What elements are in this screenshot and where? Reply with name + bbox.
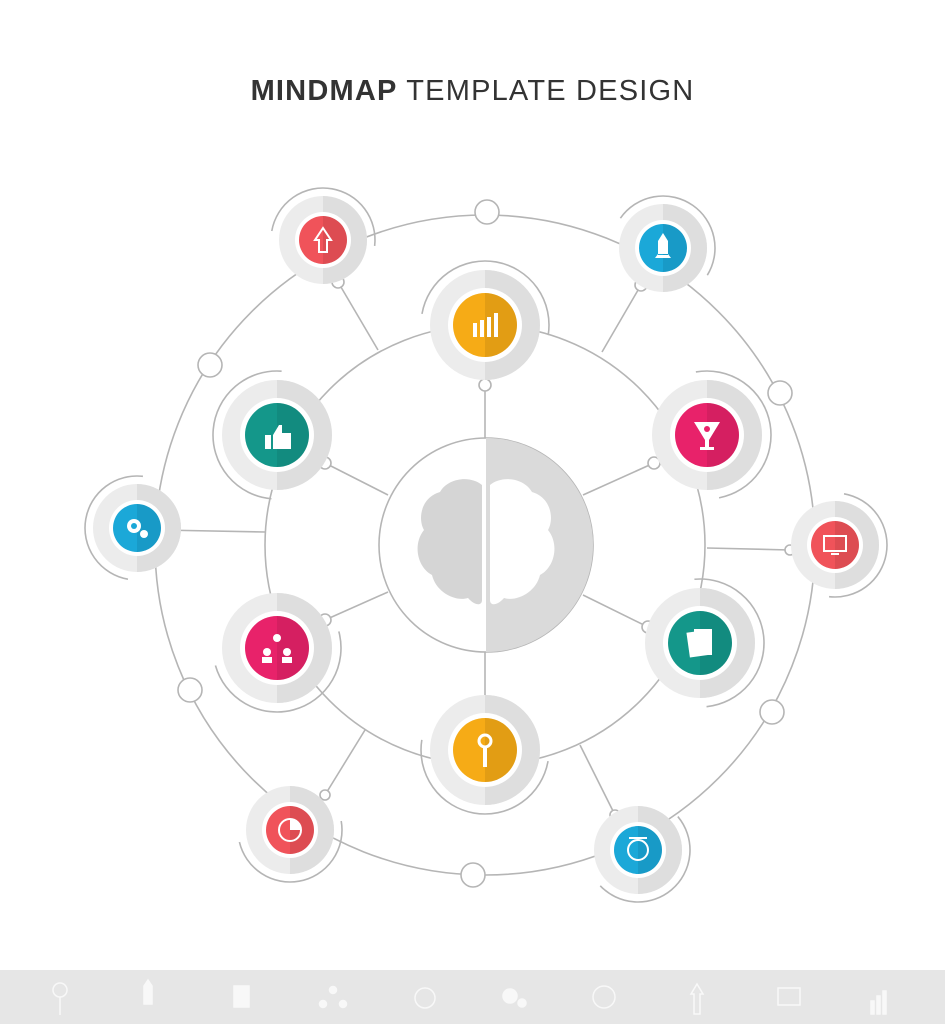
node: trophy (pink) [633, 361, 781, 509]
icon: monitor [778, 988, 800, 1005]
node: alarm clock (blue outer) [565, 777, 711, 923]
bottom icon bar [0, 970, 945, 1024]
node: thumbs up (teal) [208, 366, 346, 504]
node: key (yellow bottom) [411, 676, 559, 824]
icon: pie [593, 986, 615, 1008]
node: cards (teal) [631, 574, 769, 712]
node: rocket (blue outer) [591, 176, 735, 320]
connectors [160, 282, 790, 815]
icon: cards [234, 986, 249, 1007]
joint dots [150, 276, 795, 820]
icon: key [53, 983, 67, 1015]
inner ring [265, 325, 705, 765]
node: pie chart (red outer) [230, 770, 350, 890]
icon: clock [415, 988, 435, 1008]
icon: rocket [144, 980, 152, 1004]
title: MINDMAP TEMPLATE DESIGN [251, 75, 694, 107]
icon: bars [871, 991, 886, 1014]
node: gears (blue outer) [77, 468, 197, 588]
node: growth chart (yellow top) [411, 251, 559, 399]
outer ring dots [178, 200, 792, 887]
icon: gears [503, 989, 526, 1007]
outer ring [155, 215, 815, 875]
node: team (pink) [199, 570, 355, 726]
icon: arrow up [691, 984, 703, 1014]
icon: team [320, 986, 346, 1008]
brain center [379, 438, 593, 652]
node: arrow up (red outer) [263, 180, 383, 300]
node: monitor (red outer) [775, 485, 895, 605]
